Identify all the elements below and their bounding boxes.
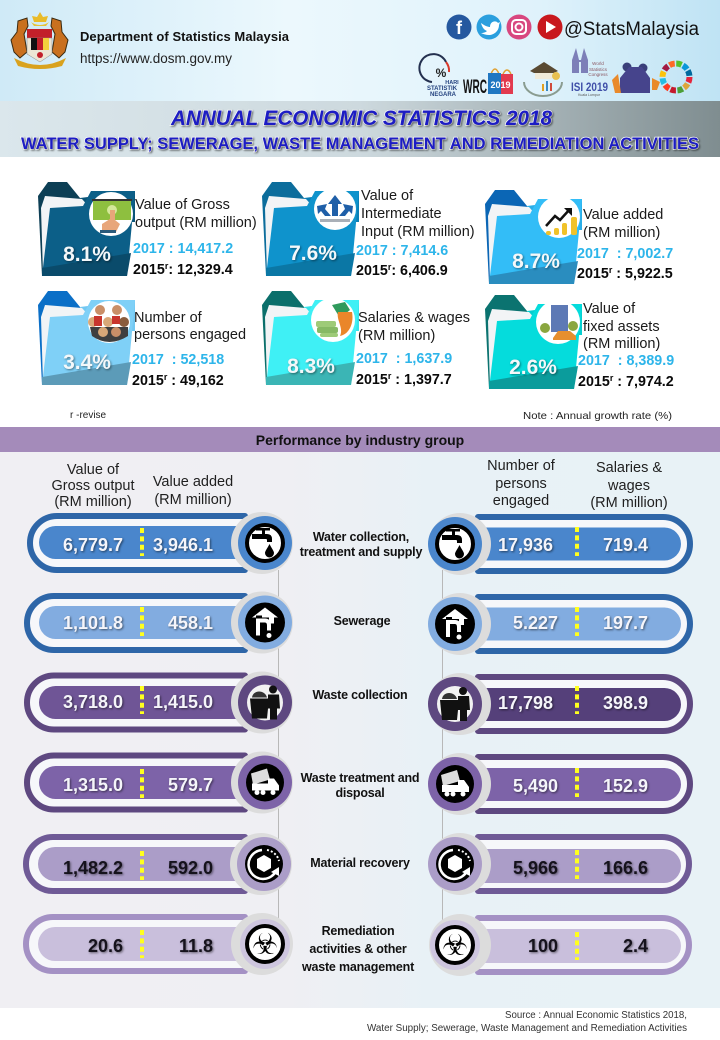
- 2015 value: r: [164, 372, 168, 382]
- 2017 value: 2017 : 14,417.2: [133, 241, 233, 257]
- panel: value of gross output: [38, 182, 257, 278]
- column heading: persons engaged: Number of: [487, 458, 556, 474]
- salaries value: 197.7: [603, 613, 648, 633]
- icon: folder: [262, 182, 359, 276]
- icon: garbage truck: [436, 765, 474, 803]
- persons engaged value: 5.227: [513, 613, 558, 633]
- title: ANNUAL ECONOMIC STATISTICS 2018: [170, 107, 552, 130]
- source note: Source : Annual Economic Statistics 2018,: [505, 1010, 687, 1021]
- logo: Hari Statistik Negara: [419, 54, 459, 98]
- gross output value: 1,101.8: [63, 613, 123, 633]
- partner logos: [419, 48, 690, 98]
- logo: ISI 2019: [571, 48, 608, 97]
- row label: water collection: Water collection,: [313, 530, 409, 544]
- label: Value of: [583, 301, 636, 317]
- logo: ISI 2019: Congress: [588, 72, 608, 77]
- panel: number of persons engaged: [38, 291, 246, 389]
- column heading: salaries and wages: (RM million): [590, 495, 668, 511]
- row: sewerage right: [428, 593, 690, 655]
- 2017 value: 2017 : 7,002.7: [577, 246, 673, 262]
- label: fixed assets: [583, 319, 660, 335]
- logo: Hari Statistik Negara: NEGARA: [430, 92, 457, 98]
- icon: material recycling: [436, 845, 474, 883]
- icon: material recycling: [245, 845, 283, 883]
- persons engaged value: 17,798: [498, 693, 553, 713]
- organisation name: Department of Statistics Malaysia: [80, 29, 290, 44]
- gross output value: 1,482.2: [63, 858, 123, 878]
- row: waste treatment right: [428, 753, 690, 815]
- growth rate: 7.6%: [289, 242, 337, 265]
- icon: sewerage house: [245, 602, 285, 642]
- value added value: 458.1: [168, 613, 213, 633]
- icon: garbage truck: [246, 764, 284, 802]
- icon: folder: [38, 291, 135, 385]
- logo: WRC 2019: WRC: [463, 77, 487, 98]
- icon: coat of arms: [11, 12, 68, 69]
- icon: person with bin: [437, 686, 473, 722]
- 2015 value: : 49,162: [167, 373, 224, 389]
- logo: Hari Statistik Negara: STATISTIK: [427, 86, 458, 92]
- growth rate: 8.1%: [63, 243, 111, 266]
- source note: Water Supply; Sewerage, Waste Management and Remediation Activities: [367, 1023, 687, 1034]
- row label: remediation: waste management: [301, 960, 415, 974]
- value added value: 592.0: [168, 858, 213, 878]
- 2015 value: 2015: [577, 266, 609, 282]
- icon: folder: [38, 182, 135, 276]
- value added value: 579.7: [168, 775, 213, 795]
- panel: value of intermediate input: [262, 182, 475, 279]
- subtitle: WATER SUPPLY; SEWERAGE, WASTE MANAGEMENT AND REMEDIATION ACTIVITIES: [21, 134, 699, 153]
- logo: Hari Statistik Negara: %: [436, 66, 447, 80]
- salaries value: 152.9: [603, 776, 648, 796]
- label: persons engaged: [134, 327, 246, 343]
- value added value: 11.8: [179, 936, 213, 956]
- row: material recovery right: [428, 833, 689, 895]
- icon: water tap: [247, 525, 283, 561]
- value added value: 1,415.0: [153, 692, 213, 712]
- 2015 value: r: [388, 262, 392, 272]
- section heading band: [0, 427, 720, 452]
- 2015 value: 2015: [356, 372, 388, 388]
- logo: ISI 2019: Statistics: [589, 67, 608, 72]
- column heading: salaries and wages: Salaries &: [596, 460, 662, 476]
- 2015 value: 2015: [132, 373, 164, 389]
- icon: rising chart: [538, 196, 580, 238]
- row label: material recovery: Material recovery: [310, 856, 410, 870]
- row label: waste treatment: disposal: [335, 786, 385, 800]
- revise note: r -revise: [70, 410, 107, 421]
- icon: person with bin: [247, 684, 283, 720]
- column heading: salaries and wages: wages: [607, 478, 650, 494]
- gross output value: 1,315.0: [63, 775, 123, 795]
- icon: building and car: [536, 300, 580, 344]
- label: (RM million): [583, 225, 660, 241]
- 2015 value: : 12,329.4: [168, 262, 233, 278]
- label: (RM million): [358, 328, 435, 344]
- row: waste collection right: [428, 673, 690, 735]
- 2017 value: 2017 : 8,389.9: [578, 353, 674, 369]
- growth rate: 2.6%: [509, 356, 557, 379]
- label: Salaries & wages: [358, 310, 470, 326]
- row label: waste collection: Waste collection: [313, 688, 407, 702]
- label: output (RM million): [135, 215, 257, 231]
- 2015 value: r: [165, 261, 169, 271]
- row label: water collection: treatment and supply: [300, 545, 422, 559]
- social handle: @StatsMalaysia: [564, 19, 699, 40]
- persons engaged value: 100: [528, 936, 558, 956]
- logo: ISI 2019: World: [592, 61, 604, 66]
- logo: survey house: [524, 62, 562, 96]
- salaries value: 719.4: [603, 535, 648, 555]
- growth rate: 8.3%: [287, 355, 335, 378]
- 2017 value: 2017 : 7,414.6: [356, 243, 448, 259]
- label: Value added: [583, 207, 663, 223]
- row: waste collection left: [27, 672, 293, 734]
- header background: [0, 0, 720, 101]
- icon: water tap: [437, 526, 473, 562]
- persons engaged value: 5,490: [513, 776, 558, 796]
- value added value: 3,946.1: [153, 535, 213, 555]
- logo: figures: [612, 62, 660, 93]
- row label: remediation: activities & other: [309, 942, 407, 956]
- column heading: persons engaged: persons: [495, 476, 547, 492]
- icon: cash and hand: [89, 192, 133, 236]
- row: remediation left: [26, 913, 293, 975]
- 2015 value: 2015: [578, 374, 610, 390]
- 2015 value: : 6,406.9: [391, 263, 448, 279]
- icon: sewerage house: [435, 604, 475, 644]
- website: https://www.dosm.gov.my: [80, 51, 232, 66]
- icon: biohazard: [247, 926, 283, 962]
- logo: Hari Statistik Negara: HARI: [445, 80, 459, 86]
- row: material recovery left: [26, 833, 292, 895]
- 2015 value: 2015: [133, 262, 165, 278]
- icon: folder: [262, 291, 359, 385]
- label: Input (RM million): [361, 224, 475, 240]
- title band: [0, 101, 720, 157]
- social icons: [446, 14, 562, 40]
- social icons: f: [456, 18, 463, 38]
- icon: group of people: [88, 301, 130, 343]
- 2015 value: r: [610, 373, 614, 383]
- column heading: gross output: (RM million): [54, 494, 132, 510]
- row: waste treatment left: [27, 752, 293, 814]
- persons engaged value: 5,966: [513, 858, 558, 878]
- growth rate note: Note : Annual growth rate (%): [523, 410, 672, 422]
- column heading: persons engaged: engaged: [493, 493, 549, 509]
- icon: money bag: [311, 298, 355, 342]
- gross output value: 6,779.7: [63, 535, 123, 555]
- row: water collection left: [30, 512, 293, 574]
- panel: value added: [485, 190, 673, 284]
- persons engaged value: 17,936: [498, 535, 553, 555]
- row label: sewerage: Sewerage: [334, 614, 391, 628]
- row: remediation right: [429, 914, 689, 976]
- row: water collection right: [428, 513, 690, 575]
- label: Intermediate: [361, 206, 442, 222]
- salaries value: 2.4: [623, 936, 648, 956]
- row label: remediation: Remediation: [322, 924, 394, 938]
- 2015 value: 2015: [356, 263, 388, 279]
- column heading: gross output: Gross output: [51, 478, 135, 494]
- 2015 value: : 5,922.5: [612, 266, 673, 282]
- column heading: value added: Value added: [153, 474, 233, 490]
- 2015 value: : 7,974.2: [613, 374, 674, 390]
- right connector line: [442, 570, 444, 920]
- logo: SDG wheel: [662, 64, 690, 90]
- section heading band: Performance by industry group: [256, 432, 464, 448]
- logo: WRC 2019: 2019: [490, 80, 511, 90]
- icon: arrows: [314, 188, 356, 230]
- gross output value: 3,718.0: [63, 692, 123, 712]
- column heading: gross output: Value of: [67, 462, 120, 478]
- 2017 value: 2017 : 1,637.9: [356, 351, 452, 367]
- panel: salaries and wages: [262, 291, 470, 388]
- gross output value: 20.6: [88, 936, 123, 956]
- 2015 value: r: [609, 265, 613, 275]
- column heading: value added: (RM million): [154, 492, 232, 508]
- growth rate: 3.4%: [63, 351, 111, 374]
- label: Value of: [361, 188, 414, 204]
- 2015 value: : 1,397.7: [391, 372, 452, 388]
- left connector line: [278, 570, 280, 920]
- panel: performance background: [0, 452, 720, 1008]
- salaries value: 398.9: [603, 693, 648, 713]
- icon: folder: [485, 295, 582, 389]
- icon: biohazard: [437, 927, 473, 963]
- growth rate: 8.7%: [512, 250, 560, 273]
- row label: waste treatment: Waste treatment and: [301, 771, 419, 785]
- row: sewerage left: [27, 592, 293, 654]
- panel: value of fixed assets: [485, 295, 674, 390]
- label: Number of: [134, 310, 203, 326]
- icon: folder: [485, 190, 582, 284]
- logo: ISI 2019: Kuala Lumpur: [578, 93, 601, 97]
- label: (RM million): [583, 336, 660, 352]
- logo: ISI 2019: ISI 2019: [571, 82, 608, 94]
- 2015 value: r: [388, 371, 392, 381]
- label: Value of Gross: [135, 197, 230, 213]
- 2017 value: 2017 : 52,518: [132, 352, 224, 368]
- logo: WRC 2019: [463, 69, 513, 98]
- salaries value: 166.6: [603, 858, 648, 878]
